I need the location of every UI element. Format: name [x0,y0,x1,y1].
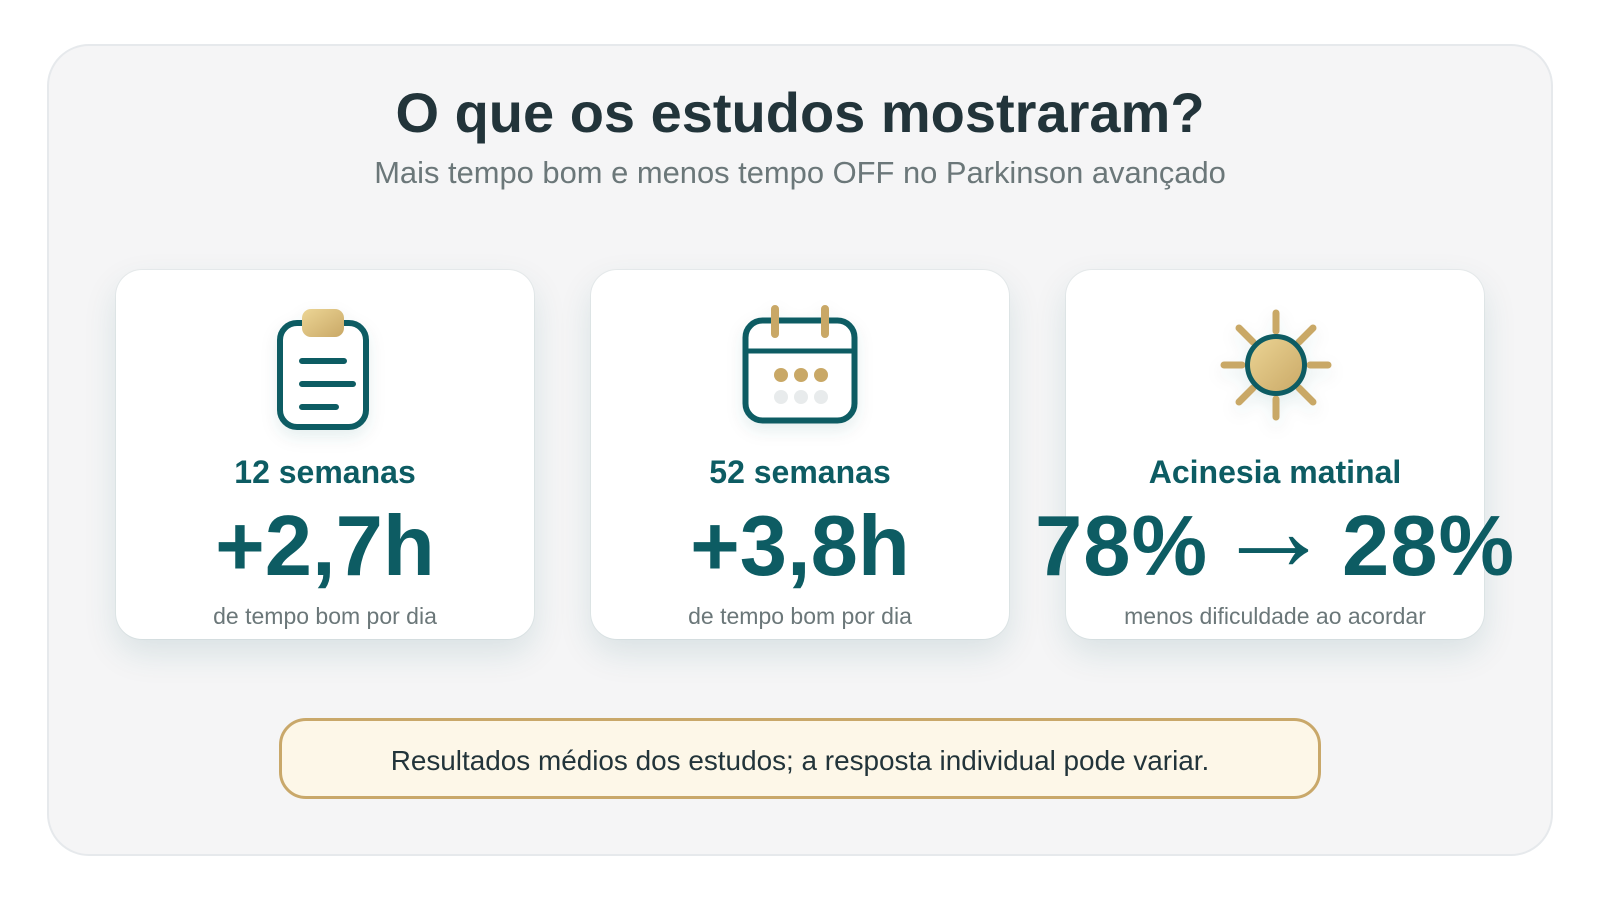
card 2 value: +3,8h [690,499,910,594]
card 2 description: de tempo bom por dia [688,603,912,629]
card 3 value [1035,464,1515,595]
callout [279,718,1321,799]
card: 52 semanas [591,270,1009,639]
card 3 value: 78% [1035,499,1208,594]
card: 12 semanas [116,270,534,639]
card: acinesia matinal [1066,270,1484,639]
card 3 heading: Acinesia matinal [1149,454,1401,490]
card 1 value: +2,7h [215,499,435,594]
card 3 value: → [1215,464,1332,595]
card 1 heading: 12 semanas [234,454,416,490]
callout text: Resultados médios dos estudos; a resposta individual pode variar. [391,745,1209,776]
card 3 value: 28% [1342,499,1515,594]
title: O que os estudos mostraram? [395,81,1205,144]
subtitle: Mais tempo bom e menos tempo OFF no Parkinson avançado [374,155,1226,190]
card 1 description: de tempo bom por dia [213,603,437,629]
card 2 heading: 52 semanas [709,454,891,490]
card 3 description: menos dificuldade ao acordar [1124,603,1426,629]
